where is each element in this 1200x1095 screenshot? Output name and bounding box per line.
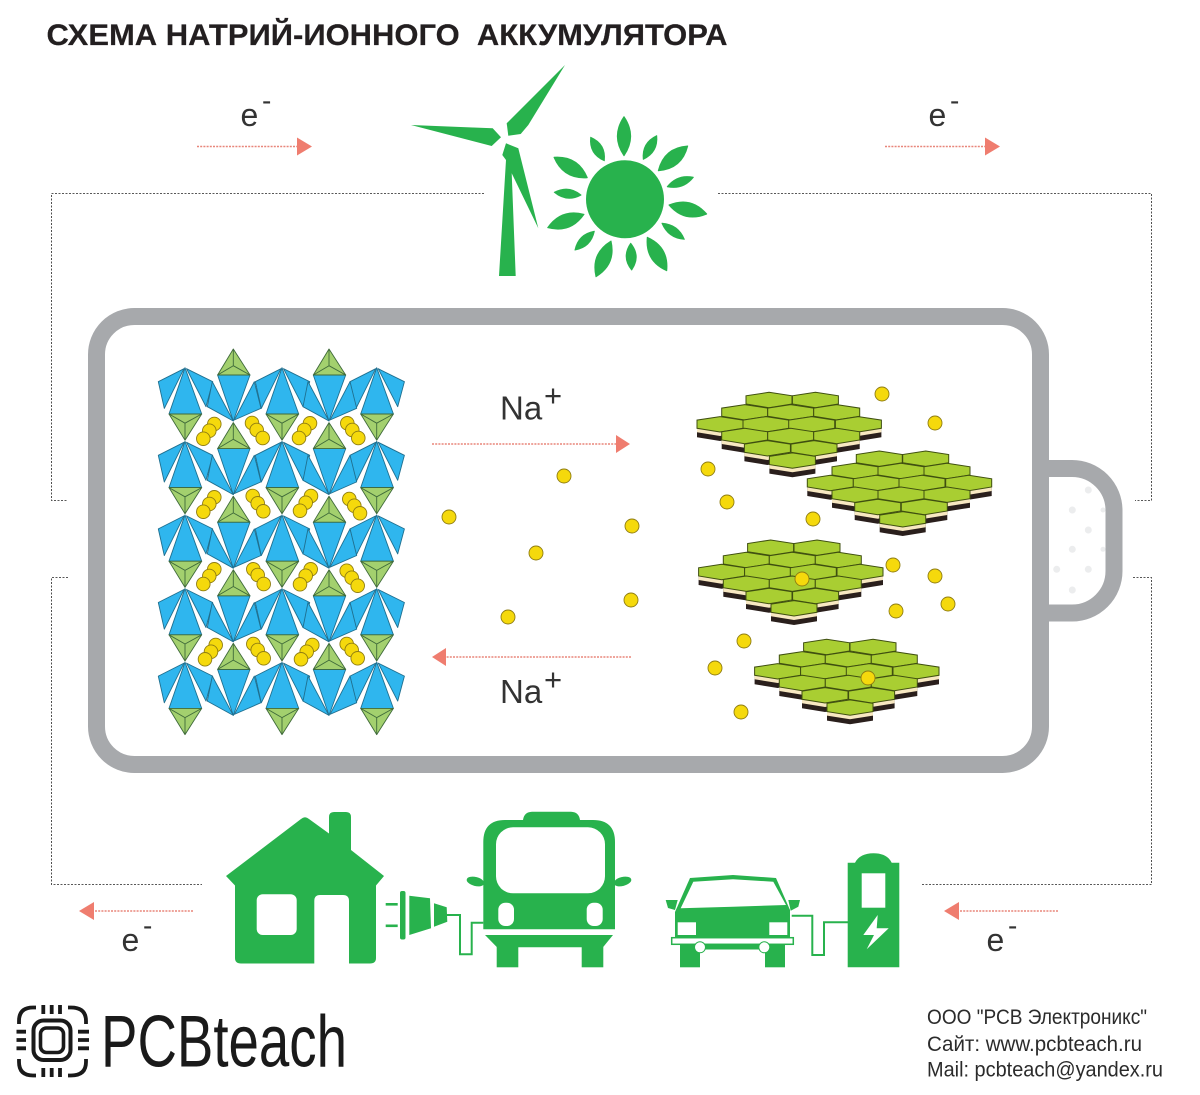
- battery casing: [96, 316, 1114, 764]
- electron label top right: e: [928, 97, 946, 133]
- electron label bottom left: e: [122, 922, 139, 958]
- icon: charging station: [848, 853, 899, 967]
- electron label bottom left: -: [143, 910, 152, 941]
- anode graphite sheets: [697, 392, 992, 724]
- arrow: Na+ to cathode: [432, 648, 631, 666]
- arrow: electrons bottom left: [79, 902, 193, 920]
- electron label bottom right: e: [986, 922, 1004, 958]
- company contacts: Сайт: www.pcbteach.ru: [927, 1033, 1142, 1056]
- label: Na+ lower: [500, 662, 562, 710]
- icon: plug: [386, 891, 483, 954]
- arrow: electrons top right: [885, 138, 1000, 156]
- electron label top left: -: [262, 85, 271, 116]
- electron label bottom left: [122, 910, 152, 958]
- label: Na+ upper: Na: [500, 389, 543, 426]
- icon: sun: [548, 117, 707, 277]
- label: Na+ upper: [500, 378, 562, 426]
- arrow: Na+ to anode: [432, 435, 630, 453]
- electron label top left: [240, 85, 271, 133]
- label: Na+ lower: Na: [500, 673, 543, 710]
- label: Na+ upper: +: [544, 378, 562, 413]
- company contacts: Mail: pcbteach@yandex.ru: [927, 1059, 1163, 1082]
- electron label top right: [928, 85, 959, 133]
- company contacts: [927, 1006, 1163, 1082]
- icon: bus: [466, 812, 632, 967]
- icon: car: [666, 875, 800, 967]
- company contacts: ООО "РСВ Электроникс": [927, 1006, 1147, 1029]
- electron label top right: -: [950, 85, 959, 116]
- logo: chip icon: [16, 1005, 89, 1077]
- icon: wind turbine: [411, 65, 565, 276]
- arrow: electrons bottom right: [944, 902, 1058, 920]
- icon: house: [226, 812, 384, 964]
- sodium ions in cathode: [196, 416, 367, 666]
- cathode crystal lattice: [158, 349, 404, 735]
- free sodium ions: [442, 387, 955, 719]
- logo: wordmark: PCBteach: [101, 1002, 347, 1083]
- label: Na+ lower: +: [544, 662, 562, 697]
- electron label bottom right: [986, 910, 1017, 958]
- battery terminal dots: [1053, 486, 1106, 594]
- circuit wires: [52, 194, 1152, 884]
- wire: car to charging station: [792, 916, 848, 955]
- arrow: electrons top left: [197, 138, 312, 156]
- title: СХЕМА НАТРИЙ-ИОННОГО АККУМУЛЯТОРА: [46, 18, 728, 52]
- electron label top left: e: [240, 97, 258, 133]
- electron label bottom right: -: [1008, 910, 1017, 941]
